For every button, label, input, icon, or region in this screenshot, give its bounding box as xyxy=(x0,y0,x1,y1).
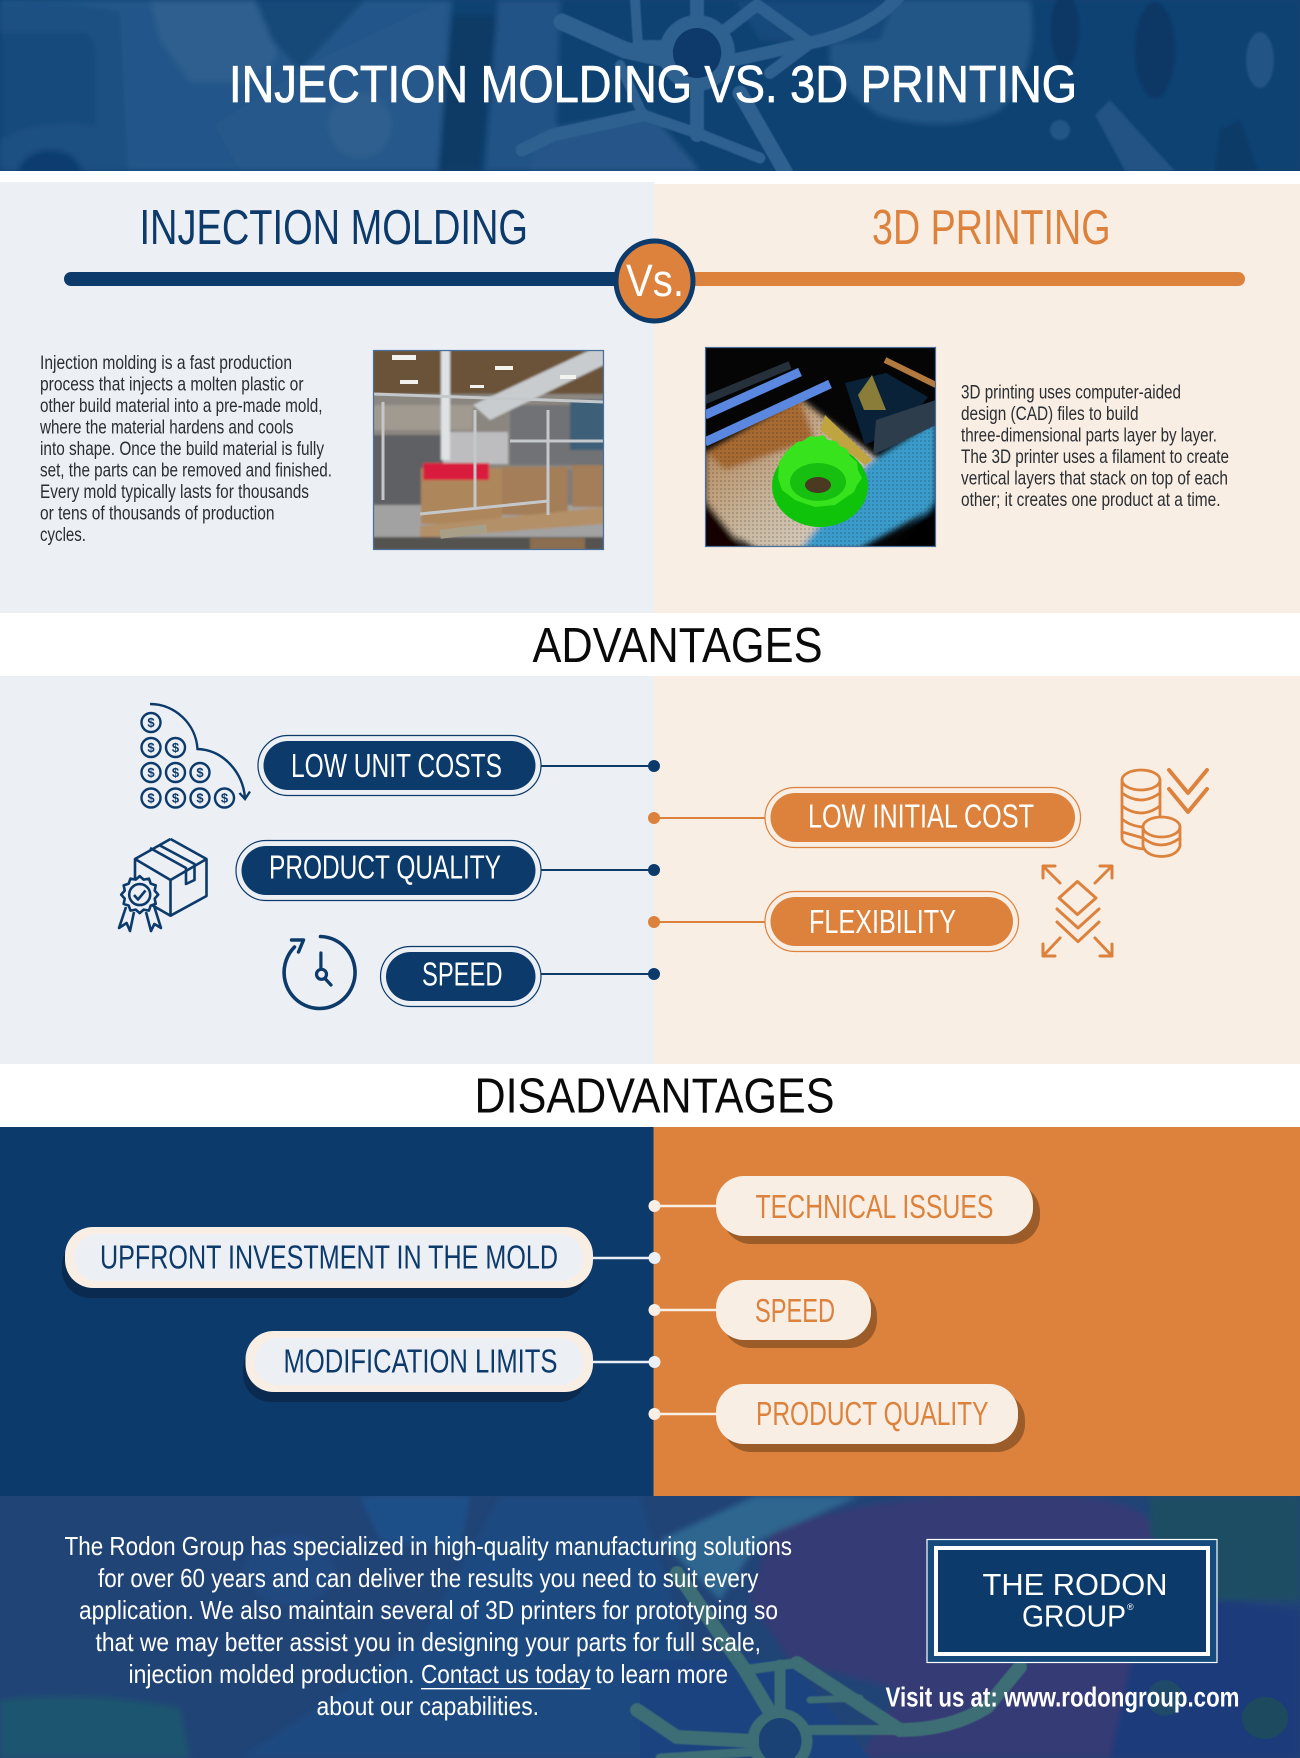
footer paragraph: about our capabilities. xyxy=(316,1691,539,1721)
pill: technical issues xyxy=(716,1176,1040,1244)
footer paragraph: for over 60 years and can deliver the results you need to suit every xyxy=(98,1563,758,1593)
connector: modification limits xyxy=(593,1356,660,1368)
description: 3D printing: 3D printing uses computer-aided xyxy=(961,382,1181,404)
description: injection molding xyxy=(39,352,332,546)
icon: flexibility arrows xyxy=(1043,866,1112,956)
pill: modification limits: MODIFICATION LIMITS xyxy=(284,1342,558,1380)
connector: speed xyxy=(648,1304,716,1316)
pill: speed: SPEED xyxy=(422,956,502,992)
icon: coins and down chevrons xyxy=(1122,770,1207,856)
connector: flexibility xyxy=(648,916,765,928)
footer paragraph: application. We also maintain several of 3D printers for prototyping so xyxy=(79,1595,778,1625)
description: injection molding: cycles. xyxy=(40,524,86,546)
icon: clock speed xyxy=(284,936,355,1008)
description: injection molding: Every mold typically lasts for thousands xyxy=(40,481,309,503)
description: injection molding: or tens of thousands of production xyxy=(40,502,274,524)
pill: flexibility xyxy=(765,892,1018,952)
photo: injection molding machine xyxy=(373,350,604,550)
footer paragraph: Contact us today xyxy=(421,1659,590,1689)
icon: coins stepping down: $ xyxy=(147,715,155,730)
pill: speed xyxy=(380,946,541,1006)
description: injection molding: process that injects a molten plastic or xyxy=(40,374,304,396)
pill: speed xyxy=(716,1280,877,1348)
footer background xyxy=(0,1495,1300,1758)
logo: The Rodon Group: GROUP xyxy=(1022,1598,1126,1634)
connector: technical issues xyxy=(648,1200,716,1212)
panel: injection molding intro xyxy=(0,182,654,613)
icon: coins stepping down: $ xyxy=(172,740,180,755)
pill: product quality: PRODUCT QUALITY xyxy=(756,1395,988,1432)
pill: product quality xyxy=(716,1384,1025,1452)
pill: upfront investment in the mold: UPFRONT INVESTMENT IN THE MOLD xyxy=(100,1238,558,1276)
pill: technical issues: TECHNICAL ISSUES xyxy=(756,1188,994,1225)
heading: advantages: ADVANTAGES xyxy=(532,619,822,673)
icon: coins stepping down: $ xyxy=(147,740,155,755)
footer paragraph: injection molded production. xyxy=(128,1659,414,1689)
versus divider: Vs. xyxy=(626,255,684,306)
footer paragraph xyxy=(64,1531,792,1721)
logo: The Rodon Group xyxy=(927,1540,1217,1662)
heading: injection molding: INJECTION MOLDING xyxy=(140,201,528,255)
header banner xyxy=(0,0,1300,171)
pill: low initial cost: LOW INITIAL COST xyxy=(808,798,1034,834)
panel: 3D printing disadvantages xyxy=(648,1127,1300,1496)
panel: 3D printing advantages xyxy=(648,676,1300,1064)
description: 3D printing: vertical layers that stack on top of each xyxy=(961,468,1228,490)
description: injection molding: Injection molding is a fast production xyxy=(40,352,292,374)
title: INJECTION MOLDING VS. 3D PRINTING xyxy=(229,56,1077,114)
panel: injection molding advantages xyxy=(0,676,654,1064)
panel: 3D printing intro xyxy=(654,184,1300,613)
icon: coins stepping down: $ xyxy=(147,765,155,780)
pill: low unit costs xyxy=(258,736,541,796)
icon: coins stepping down: $ xyxy=(172,790,180,806)
description: injection molding: set, the parts can be removed and finished. xyxy=(40,460,332,482)
description: 3D printing: three-dimensional parts layer by layer. xyxy=(961,424,1217,446)
connector: speed xyxy=(541,968,660,980)
description: injection molding: into shape. Once the build material is fully xyxy=(40,438,324,460)
icon: coins stepping down xyxy=(142,704,250,808)
heading: 3D printing: 3D PRINTING xyxy=(872,201,1110,255)
icon: box with quality badge xyxy=(119,839,206,931)
pill: product quality: PRODUCT QUALITY xyxy=(269,848,501,886)
icon: coins stepping down: $ xyxy=(196,790,204,806)
icon: coins stepping down: $ xyxy=(172,765,180,780)
connector: low initial cost xyxy=(648,812,765,824)
icon: coins stepping down: $ xyxy=(196,765,204,780)
pill: low initial cost xyxy=(765,788,1080,848)
icon: coins stepping down: $ xyxy=(221,790,229,806)
connector: product quality xyxy=(541,864,660,876)
logo: The Rodon Group: ® xyxy=(1127,1602,1134,1612)
connector: low unit costs xyxy=(541,760,660,772)
photo: 3D printer xyxy=(705,347,936,550)
panel: injection molding disadvantages xyxy=(0,1127,654,1496)
pill: speed: SPEED xyxy=(755,1292,835,1329)
description: 3D printing xyxy=(961,382,1229,511)
pill: upfront investment in the mold xyxy=(62,1227,593,1298)
description: 3D printing: other; it creates one product at a time. xyxy=(961,489,1220,511)
versus divider xyxy=(64,241,1245,321)
footer paragraph: to learn more xyxy=(596,1659,728,1689)
connector: upfront investment xyxy=(593,1252,660,1264)
heading: disadvantages: DISADVANTAGES xyxy=(474,1070,834,1124)
pill: flexibility: FLEXIBILITY xyxy=(809,903,956,940)
pill: modification limits xyxy=(243,1331,593,1402)
description: 3D printing: design (CAD) files to build xyxy=(961,403,1138,425)
footer paragraph: The Rodon Group has specialized in high-quality manufacturing solutions xyxy=(64,1531,792,1561)
icon: coins stepping down: $ xyxy=(147,790,155,806)
description: 3D printing: The 3D printer uses a filament to create xyxy=(961,446,1229,468)
footer paragraph: that we may better assist you in designing your parts for full scale, xyxy=(96,1627,761,1657)
connector: product quality xyxy=(648,1408,716,1420)
description: injection molding: other build material into a pre-made mold, xyxy=(40,395,322,417)
pill: product quality xyxy=(236,840,541,900)
pill: low unit costs: LOW UNIT COSTS xyxy=(291,747,502,784)
logo: The Rodon Group: THE RODON xyxy=(982,1567,1168,1602)
description: injection molding: where the material hardens and cools xyxy=(39,416,294,438)
